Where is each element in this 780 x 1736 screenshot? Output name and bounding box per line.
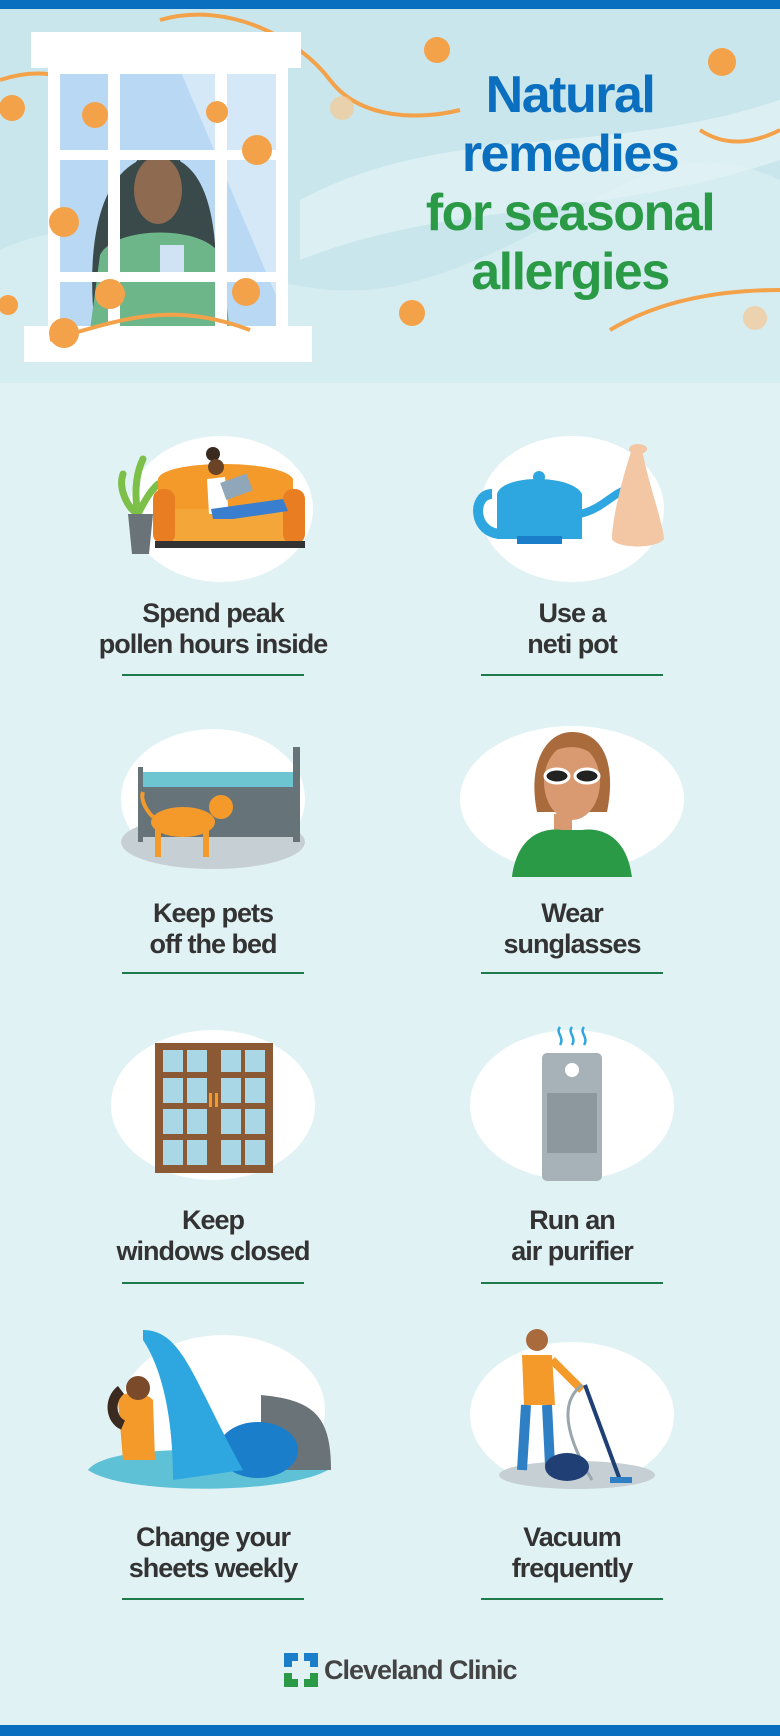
item: keep windows closed: windows closed xyxy=(116,1236,310,1266)
title: Natural xyxy=(486,66,654,124)
label: Spend peak xyxy=(142,598,284,628)
item: neti pot: Use a xyxy=(538,598,606,628)
item: run an air purifier: air purifier xyxy=(511,1236,633,1266)
logo: Cleveland Clinic: Cleveland Clinic xyxy=(324,1655,517,1685)
item: run an air purifier xyxy=(470,1026,674,1284)
item: vacuum frequently xyxy=(470,1329,674,1600)
bottom bar xyxy=(0,1725,780,1736)
header banner xyxy=(0,9,780,383)
item: wear sunglasses: sunglasses xyxy=(503,929,641,959)
item: keep pets off the bed: Keep pets xyxy=(153,898,273,928)
item: change your sheets weekly: Change your xyxy=(136,1522,290,1552)
label xyxy=(99,598,328,659)
icon: vacuuming woman xyxy=(470,1329,674,1489)
item: change your sheets weekly xyxy=(88,1330,331,1600)
icon: changing sheets xyxy=(88,1330,331,1489)
title: allergies xyxy=(471,243,669,301)
item: wear sunglasses: Wear xyxy=(541,898,603,928)
item: keep windows closed xyxy=(111,1030,315,1284)
item: wear sunglasses xyxy=(460,726,684,974)
icon: woman with sunglasses xyxy=(460,726,684,877)
top bar xyxy=(0,0,780,9)
title: remedies xyxy=(462,125,678,183)
item: neti pot: neti pot xyxy=(527,629,617,659)
icon: closed window xyxy=(111,1030,315,1180)
item: keep windows closed: Keep xyxy=(182,1205,244,1235)
title xyxy=(426,66,714,301)
item: keep pets off the bed: off the bed xyxy=(150,929,276,959)
icon: couch xyxy=(118,436,313,582)
illustration: woman at window xyxy=(24,32,312,362)
item: vacuum frequently: frequently xyxy=(512,1553,632,1583)
item: neti pot xyxy=(473,436,664,676)
item: keep pets off the bed xyxy=(121,729,305,974)
item: run an air purifier: Run an xyxy=(529,1205,615,1235)
label: pollen hours inside xyxy=(99,629,327,659)
icon: air purifier xyxy=(470,1026,674,1181)
item: change your sheets weekly: sheets weekly xyxy=(129,1553,297,1583)
title: for seasonal xyxy=(426,184,714,242)
item: vacuum frequently: Vacuum xyxy=(523,1522,621,1552)
icon: dog and bed xyxy=(121,729,305,869)
item: spend peak pollen hours inside xyxy=(99,436,328,676)
icon: neti pot and nose xyxy=(473,436,664,582)
